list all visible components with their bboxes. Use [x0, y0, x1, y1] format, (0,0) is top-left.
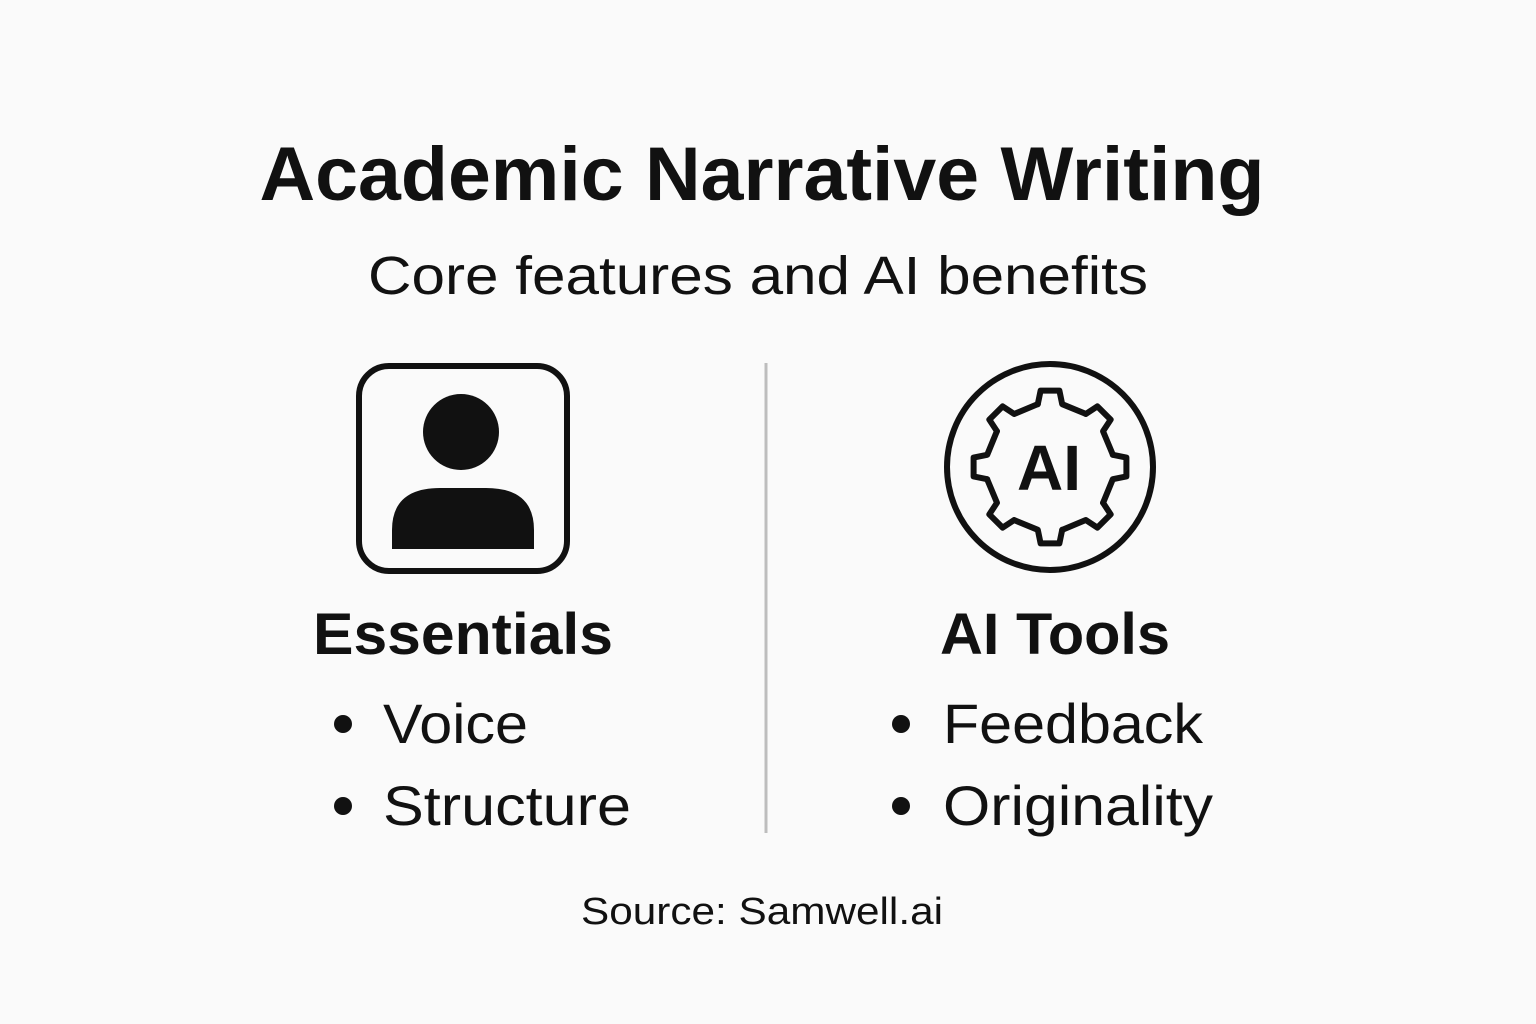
- list: essentials: [334, 692, 631, 837]
- icon: person: [359, 366, 567, 571]
- icon: AI gear: AI: [1017, 432, 1081, 504]
- list: AI tools: Feedback: [943, 692, 1204, 755]
- panel: AI tools: [892, 364, 1213, 837]
- panel: essentials: [313, 366, 631, 837]
- title: Academic Narrative Writing: [260, 132, 1264, 217]
- source: Source: Samwell.ai: [581, 891, 943, 933]
- list: AI tools: Originality: [943, 774, 1213, 837]
- list: AI tools: [892, 692, 1213, 837]
- heading: Essentials: Essentials: [313, 602, 613, 667]
- heading: AI Tools: AI Tools: [940, 602, 1170, 667]
- icon: AI gear: [947, 364, 1153, 570]
- subtitle: Core features and AI benefits: [368, 246, 1148, 306]
- list: essentials: Voice: [383, 692, 528, 755]
- list: essentials: Structure: [383, 774, 631, 837]
